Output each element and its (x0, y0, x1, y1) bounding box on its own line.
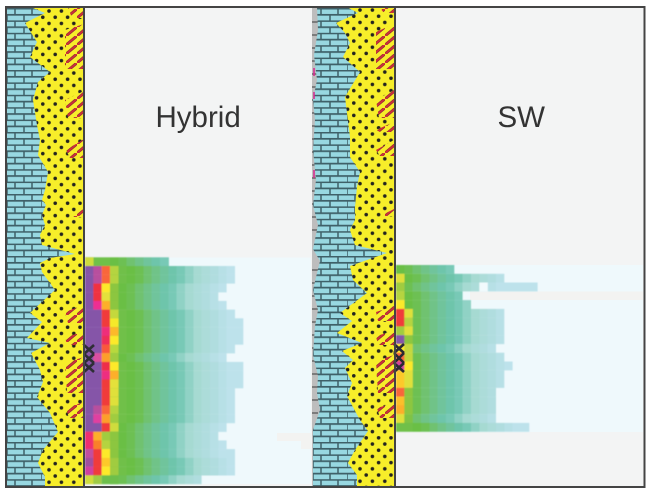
chart: SW heat map (396, 265, 643, 432)
heading: SW: SW (498, 101, 545, 134)
icon: Hybrid well cross markers (84, 345, 94, 372)
heading: Hybrid: Hybrid (156, 101, 241, 134)
chart: Hybrid heat map (85, 257, 311, 484)
icon: SW well cross markers (394, 344, 404, 372)
panel: SW well log strip (312, 7, 395, 487)
panel: Hybrid well log strip (7, 7, 84, 487)
